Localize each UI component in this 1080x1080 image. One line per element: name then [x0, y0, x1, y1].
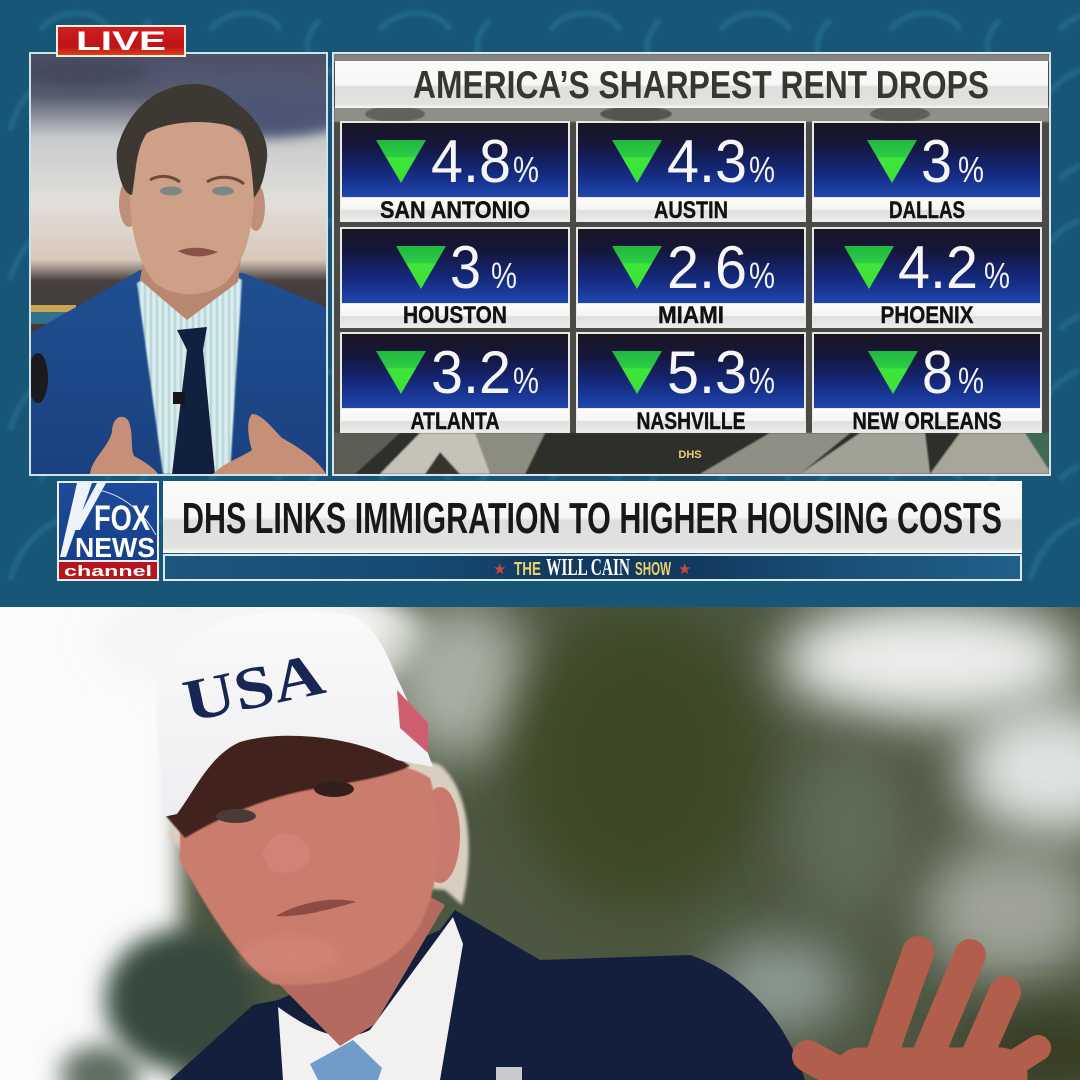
cell: Atlanta: %: [513, 360, 539, 401]
cap flag: [397, 690, 428, 753]
video panel: news host: [29, 52, 328, 476]
live badge: LIVE: [76, 26, 166, 56]
host shirt: [137, 270, 242, 474]
host tie: [172, 327, 215, 474]
show name strip: ★: [493, 561, 506, 578]
host microphone: [31, 353, 48, 403]
lapel mic: [173, 392, 185, 404]
cell: Phoenix: %: [984, 255, 1010, 296]
show name strip: ★: [678, 561, 691, 578]
host ears: [119, 185, 265, 231]
hair: [168, 759, 469, 905]
cell: New Orleans: [812, 332, 1042, 435]
cap: [157, 612, 433, 817]
cell: Austin: [576, 121, 806, 224]
shirt collar: [278, 917, 463, 1080]
cell: New Orleans: %: [958, 360, 984, 401]
host neck: [140, 260, 241, 320]
forehead shadow under brim: [165, 735, 410, 838]
host hands: [90, 417, 158, 474]
cell: Dallas: %: [958, 149, 984, 190]
cell: Phoenix: PHOENIX: [880, 302, 974, 329]
panel: rent drops board: [332, 52, 1051, 476]
fox news logo: [57, 481, 159, 581]
cell: San Antonio: %: [513, 149, 539, 190]
cell: San Antonio: SAN ANTONIO: [380, 197, 530, 224]
cell: New Orleans: 8: [922, 339, 953, 406]
fox news logo: channel: [64, 563, 152, 580]
face: [180, 761, 439, 985]
cell: Phoenix: [812, 227, 1042, 329]
source label: DHS: [678, 449, 702, 461]
headline banner: [163, 481, 1022, 553]
background: blue patterned studio wall: [0, 0, 1080, 607]
tie: [310, 1040, 382, 1080]
cell: San Antonio: 4.8: [431, 128, 511, 195]
host suit: [31, 270, 326, 474]
flag pin: [496, 1067, 522, 1080]
cell: Houston: 3: [450, 234, 481, 301]
cell: Atlanta: 3.2: [431, 339, 511, 406]
cell: New Orleans: NEW ORLEANS: [852, 408, 1002, 435]
host hair: [117, 84, 267, 198]
cell: Miami: 2.6: [667, 234, 747, 301]
cell: Atlanta: [340, 332, 570, 435]
neck: [278, 897, 445, 1046]
fox news logo: FOX: [94, 499, 151, 538]
show name strip: WILL CAIN: [546, 555, 630, 581]
show name strip: SHOW: [635, 559, 671, 579]
host face: [130, 120, 254, 294]
cell: Houston: [340, 227, 570, 329]
eyes and mouth: [216, 781, 356, 973]
photo background: [40, 607, 1080, 1080]
cell: Nashville: 5.3: [667, 339, 747, 406]
cell: Atlanta: ATLANTA: [410, 408, 500, 435]
photo: man in USA cap: [40, 607, 1080, 1080]
cell: Dallas: [812, 121, 1042, 224]
cell: Houston: HOUSTON: [403, 302, 507, 329]
money background texture: [334, 54, 1049, 474]
cell: Nashville: [576, 332, 806, 435]
cap lettering: USA: [178, 640, 330, 734]
cell: Miami: %: [749, 255, 775, 296]
cell: Austin: 4.3: [667, 128, 747, 195]
live badge: [56, 25, 186, 57]
cell: Nashville: %: [749, 360, 775, 401]
cell: Houston: %: [491, 255, 517, 296]
cell: Miami: MIAMI: [658, 302, 724, 329]
raised hand: [808, 952, 1038, 1080]
cell: Austin: %: [749, 149, 775, 190]
cell: Austin: AUSTIN: [654, 197, 728, 224]
cell: Dallas: 3: [921, 128, 952, 195]
suit: [170, 910, 805, 1080]
cell: Phoenix: 4.2: [898, 234, 978, 301]
cell: San Antonio: [340, 121, 570, 224]
cell: Dallas: DALLAS: [889, 197, 965, 224]
show name strip: THE: [514, 559, 541, 579]
show name strip: [163, 554, 1022, 581]
cell: Miami: [576, 227, 806, 329]
ear: [432, 787, 460, 883]
host eyes and mouth: [150, 176, 244, 256]
fox news logo: NEWS: [75, 532, 155, 563]
cell: Nashville: NASHVILLE: [636, 408, 746, 435]
